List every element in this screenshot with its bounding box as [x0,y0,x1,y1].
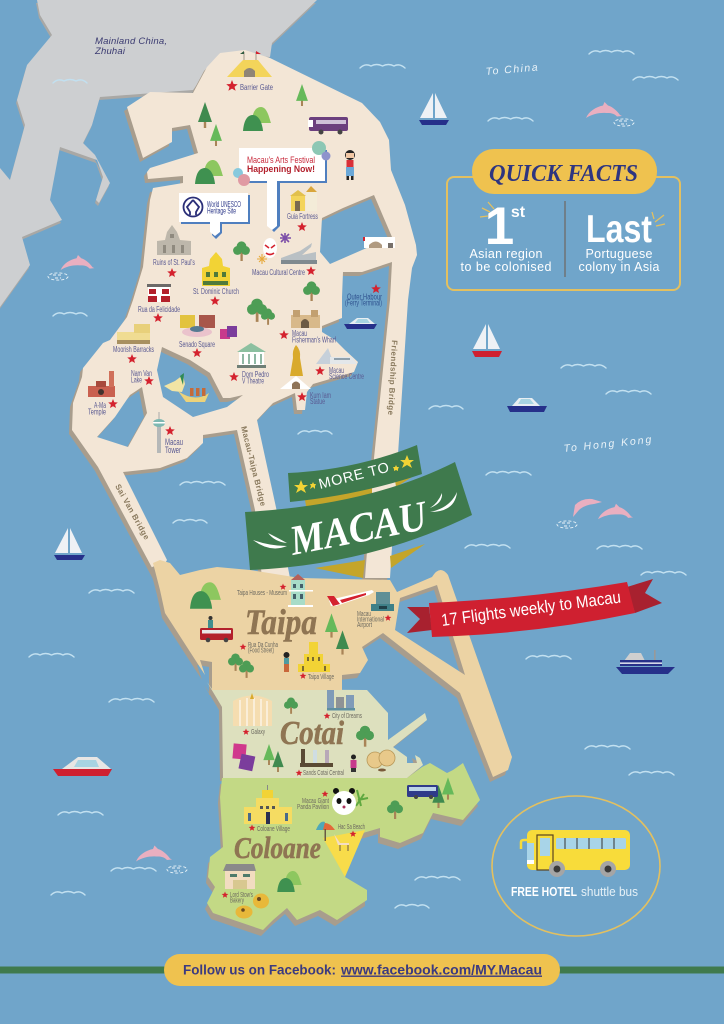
icon: person Cotai [350,754,356,772]
icon: Taipa Houses Museum [288,574,313,607]
icon: shopping bags north [220,326,237,339]
dolphins: pair east [557,499,633,528]
banner: MORE TO [288,445,422,502]
footer: Facebook pill: Follow us on Facebook: [183,962,336,978]
icon: airplane [327,590,374,606]
land shadows: Macau peninsula with bridges [69,54,414,582]
icon: Coloane Village church [244,785,292,824]
decoration: white leaves [253,492,457,548]
mainland China land mass [0,0,317,310]
trees and hills: Coloane [277,777,454,892]
place labels: Macau peninsula: St. Dominic Church [193,287,239,296]
place labels: Macau peninsula: Macau Cultural Centre [252,268,305,277]
icon: navy bus [407,785,438,799]
place labels: Taipa, Cotai, Coloane: Airport [357,620,372,629]
place labels: Taipa, Cotai, Coloane: Coloane Village [257,824,290,833]
place labels: Macau peninsula [88,83,382,455]
callout: Macau's Arts Festival [233,141,330,232]
fact divider [564,201,566,277]
sea waves [29,50,686,908]
footer: Facebook pill [164,954,560,986]
label: free hotel shuttle bus: shuttle bus [581,884,638,899]
label: Friendship Bridge: Friendship Bridge [386,340,399,416]
icon: egg tarts [236,894,269,918]
icon: Guia Fortress [290,186,317,211]
icon: Macau International Airport [371,592,394,611]
dolphin: west [48,255,94,280]
icon: Taipa Village church [298,642,330,672]
trees and hills: peninsula [195,84,320,325]
heading pill: quick facts [472,149,657,194]
place labels: Macau peninsula: Statue [310,397,325,406]
icon: World Heritage emblem [184,198,202,216]
place labels: Macau peninsula: Rua da Felicidade [138,305,180,314]
label: World UNESCO Heritage Site: Heritage Site [207,206,236,216]
label: flights: 17 Flights weekly to Macau [440,588,622,630]
ferry: east [616,650,675,674]
footer line [0,966,724,974]
icon: A-Ma Temple [88,371,115,397]
icon: dragon boat [164,373,209,402]
place labels: Macau peninsula: Moorish Barracks [113,345,154,354]
banner: 17 Flights weekly [407,579,662,637]
place labels: Taipa, Cotai, Coloane: (Food Street) [248,646,274,654]
icon: Galaxy hotel [233,693,272,726]
place labels: Taipa, Cotai, Coloane: Sands Cotai Central [303,768,344,777]
fact: last Portuguese colony: colony in Asia [578,260,660,274]
label: MACAU: MACAU [285,493,433,565]
icon: Macau Cultural Centre with mask and fireworks [257,233,317,264]
fact: last Portuguese colony: Last [586,208,652,251]
place labels: Macau peninsula: Dom Pedro [242,370,269,379]
label: to Hong Kong: To Hong Kong [563,434,652,455]
icon: shopping bags Cotai [232,743,255,771]
land: Cotai [207,682,427,778]
icon: person Taipa [284,652,290,672]
label: festival heading: Macau's Arts Festival [247,155,315,166]
icon: Dom Pedro V Theatre [237,343,266,368]
footer: Facebook pill: www.facebook.com/MY.Macau [340,962,542,978]
icon: Moorish Barracks [117,324,150,344]
Hac Sa beach sand [323,830,365,877]
fact: first Asian region: 1 [485,197,514,256]
place labels: Macau peninsula: Nam Van [131,369,152,378]
sailboat: red hull [472,324,502,357]
icon: yellow shuttle bus [521,830,630,877]
place labels: Macau peninsula: V Theatre [242,376,264,386]
place labels: Taipa, Cotai, Coloane: Lord Stow's [230,890,253,899]
icon: beach umbrella and sunbather [316,822,349,851]
fact: first Asian region [460,197,552,274]
dolphin: north east [586,102,634,126]
fact: last Portuguese colony [578,208,665,274]
icon: Macau Science Centre [316,348,357,364]
place labels: Macau peninsula: Lake [131,376,142,384]
fact: first Asian region: st [511,204,526,221]
place labels: Taipa, Cotai, Coloane: Panda Pavilion [297,802,329,811]
icon: Kun Iam statue [280,345,311,389]
label: Sai Van Bridge: Sai Van Bridge [113,483,151,542]
icon: Rua da Felicidade building [147,284,171,302]
icon: Senado Square [180,315,215,337]
label: to China: To China [485,61,538,78]
label: World UNESCO Heritage Site: World UNESCO [207,200,241,209]
icon: giant panda with bamboo [332,788,368,815]
place labels: Macau peninsula: Macau [292,329,307,338]
place labels: Taipa, Cotai, Coloane: Hac Sa Beach [338,822,365,831]
trees and hills: Taipa [190,582,349,678]
place labels: Macau peninsula: Outer Habour [347,292,382,302]
icon: St. Dominic's Church [202,252,230,286]
fact: first Asian region: to be colonised [460,260,552,274]
dolphin: south [136,846,187,873]
land: Macau peninsula with bridges [72,50,417,578]
banner: MACAU [245,462,472,570]
label: mainland China: Zhuhai [94,46,126,57]
heading pill: quick facts: QUICK FACTS [489,161,638,187]
place labels: Macau peninsula: Fisherman's Wharf [292,336,337,344]
icon: UNESCO callout [179,193,250,239]
district title: Taipa: Taipa [245,602,317,642]
banner fold: mustard ribbon backs [305,474,425,578]
icon: Sands Cotai Central [300,749,333,767]
place labels: Macau peninsula: Tower [165,445,181,455]
district title: Cotai: Cotai [280,715,344,752]
boat: red hull west [53,757,112,776]
place labels: Taipa, Cotai, Coloane: Taipa Houses - Museum [237,588,287,597]
panel: quick facts [447,149,680,290]
place labels: Taipa, Cotai, Coloane: City of Dreams [332,711,362,720]
label: Macau-Taipa Bridge: Macau-Taipa Bridge [239,425,268,508]
place labels: Macau peninsula: (Ferry Terminal) [345,298,382,308]
icon: Ruins of St. Paul's [157,225,191,255]
place labels: Taipa, Cotai, Coloane [230,588,384,904]
land: Taipa [153,560,512,777]
place labels: Taipa, Cotai, Coloane: Taipa Village [308,672,334,681]
place labels: Macau peninsula: Guia Fortress [287,212,318,221]
icon: Macau Fisherman's Wharf [291,310,320,328]
icon: purple tour bus [308,117,348,134]
place labels: Taipa, Cotai, Coloane: International [357,614,384,624]
place labels: Taipa, Cotai, Coloane: Macau Giant [302,796,329,805]
place labels: Taipa, Cotai, Coloane: Bakery [230,896,244,904]
place labels: Macau peninsula: Macau [329,366,344,375]
fact: last Portuguese colony: Portuguese [586,247,653,261]
boat: near outer harbour [344,318,377,329]
icon: almond cookies [367,750,395,772]
place labels: Macau peninsula: Ruins of St. Paul's [153,258,195,267]
sailboat: west [54,528,85,560]
label: free hotel shuttle bus: FREE HOTEL [511,884,577,899]
place labels: Macau peninsula: Senado Square [179,340,215,349]
place labels: Taipa, Cotai, Coloane: Galaxy [251,727,265,736]
place labels: Macau peninsula: A-Ma [94,401,106,410]
land: Coloane [207,763,480,930]
sailboat: north [419,93,449,125]
place labels: Macau peninsula: Barrier Gate [240,83,273,92]
label: happening now: Happening Now! [247,164,315,175]
icon: yellow stars [294,455,414,493]
place labels: Macau peninsula: Temple [88,408,106,416]
label: mainland China: Mainland China, [95,36,167,47]
icon: tourist girl [345,150,355,180]
icon: Barrier Gate [227,51,272,77]
place labels: Taipa, Cotai, Coloane: Macau [357,609,371,618]
place labels: Taipa, Cotai, Coloane: Rua Da Cunha [248,640,278,649]
icon: harbour white building [363,237,395,248]
icon: red bus with passenger [200,616,233,642]
panel: free hotel shuttle bus [492,796,660,936]
district title: Coloane: Coloane [234,830,321,865]
boat: navy hull east [507,398,547,412]
icon: Macau Tower [153,412,165,453]
icon: Lord Stow's Bakery [223,864,256,889]
red stars: place markers [108,80,391,898]
fact: first Asian region: Asian region [470,247,543,261]
place labels: Macau peninsula: Macau [165,437,183,447]
land shadows: southern islands [150,565,509,936]
place labels: Macau peninsula: Science Centre [329,372,364,381]
label: MORE TO: MORE TO [317,460,391,493]
place labels: Macau peninsula: Kum Iam [310,391,331,400]
icon: City of Dreams towers [327,690,355,710]
trees: Cotai [263,698,374,772]
decorative balloons [233,141,330,186]
